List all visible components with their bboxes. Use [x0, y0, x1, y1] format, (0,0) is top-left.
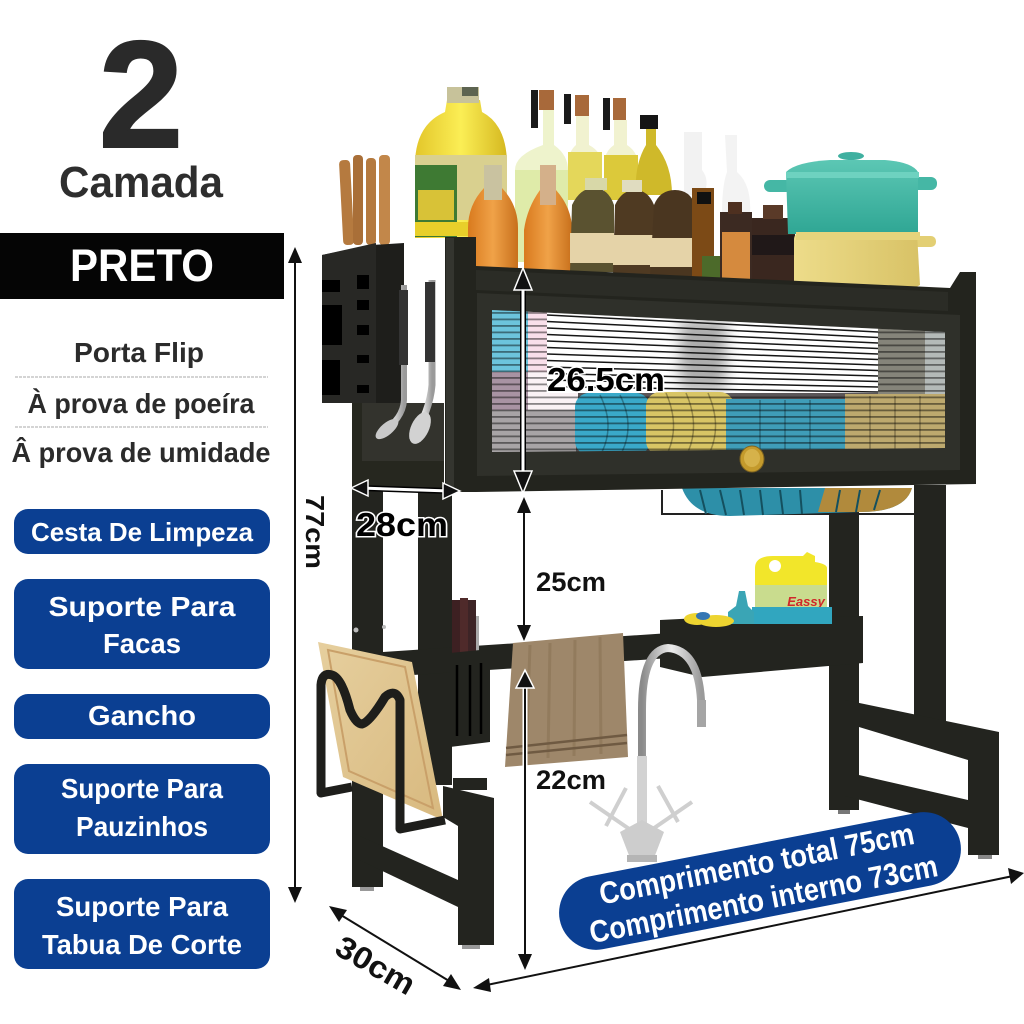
dimension: 25cm	[517, 497, 606, 641]
towel	[505, 633, 628, 767]
left rear leg	[352, 490, 383, 887]
door knob	[740, 446, 764, 472]
button: Cesta De Limpeza	[14, 509, 270, 554]
yellow pot	[794, 232, 936, 292]
teal pot	[764, 152, 937, 234]
dimension: 26.5cm: 26.5cm	[547, 361, 665, 398]
callout: length	[553, 806, 967, 956]
feature list: Â prova de umidade	[12, 437, 270, 468]
feature list: Porta Flip	[74, 337, 204, 368]
screws	[354, 625, 386, 632]
cleaning basket: Eassy	[787, 594, 826, 609]
cutting board	[318, 642, 443, 820]
left front leg	[418, 490, 452, 785]
button: Suporte Para Tabua De Corte: Tabua De Corte	[42, 929, 242, 960]
heading: Camada: Camada	[59, 158, 224, 207]
dimension: 26.5cm	[514, 268, 665, 493]
dimension: 77cm	[288, 247, 330, 903]
knife holder with knives	[322, 155, 404, 403]
dimension: 30cm	[329, 906, 461, 1002]
dish basket under cabinet	[662, 488, 920, 516]
button: Cesta De Limpeza: Cesta De Limpeza	[31, 517, 254, 547]
button: Gancho: Gancho	[88, 700, 196, 731]
dimension: total length	[473, 868, 1024, 992]
dimension: 28cm	[351, 480, 460, 543]
dimension: 28cm: 28cm	[356, 506, 448, 543]
dimension: 22cm: 22cm	[536, 765, 606, 795]
hanging ladles	[372, 280, 435, 447]
cross bar	[383, 633, 670, 677]
dimension: 22cm	[516, 670, 606, 970]
callout: length: Comprimento interno 73cm	[586, 848, 941, 950]
button: Suporte Para Facas	[14, 579, 270, 669]
dimension: 30cm: 30cm	[330, 929, 421, 1002]
colour banner: PRETO: PRETO	[70, 240, 214, 291]
knives	[339, 155, 390, 245]
button: Suporte Para Pauzinhos	[14, 764, 270, 854]
tall oil bottles	[515, 90, 750, 262]
shutter glass door	[492, 305, 948, 455]
callout: length: Comprimento total 75cm	[596, 816, 917, 912]
oil jug	[415, 87, 507, 238]
orange bottles	[468, 165, 572, 272]
faucet	[590, 648, 706, 862]
button: Suporte Para Tabua De Corte	[14, 879, 270, 969]
cleaning basket	[660, 552, 863, 677]
cabinet frame	[445, 237, 976, 492]
button: Suporte Para Pauzinhos: Pauzinhos	[76, 811, 208, 842]
box behind post	[352, 403, 444, 491]
rack lower frame	[352, 485, 999, 949]
feature list: À prova de poeíra	[28, 388, 255, 419]
left base frame	[353, 778, 494, 949]
dimension: 77cm: 77cm	[300, 495, 330, 569]
dimension: 25cm: 25cm	[536, 567, 606, 597]
shelf items	[415, 87, 937, 292]
button: Suporte Para Tabua De Corte: Suporte Para	[56, 891, 228, 922]
chopsticks	[452, 598, 479, 654]
back right leg	[914, 485, 946, 725]
chopstick holder	[450, 649, 490, 747]
button: Suporte Para Pauzinhos: Suporte Para	[61, 773, 223, 804]
button: Suporte Para Facas: Suporte Para	[48, 591, 236, 622]
button: Gancho	[14, 694, 270, 739]
button: Suporte Para Facas: Facas	[103, 628, 181, 659]
dark condiment jars	[570, 178, 795, 288]
cabinet	[445, 237, 976, 492]
feature list	[12, 337, 270, 468]
colour banner: PRETO	[0, 233, 284, 299]
heading: number 2: 2	[99, 10, 183, 180]
cutting board holder	[321, 674, 445, 829]
holder box	[322, 243, 404, 403]
right leg assembly	[829, 510, 999, 859]
